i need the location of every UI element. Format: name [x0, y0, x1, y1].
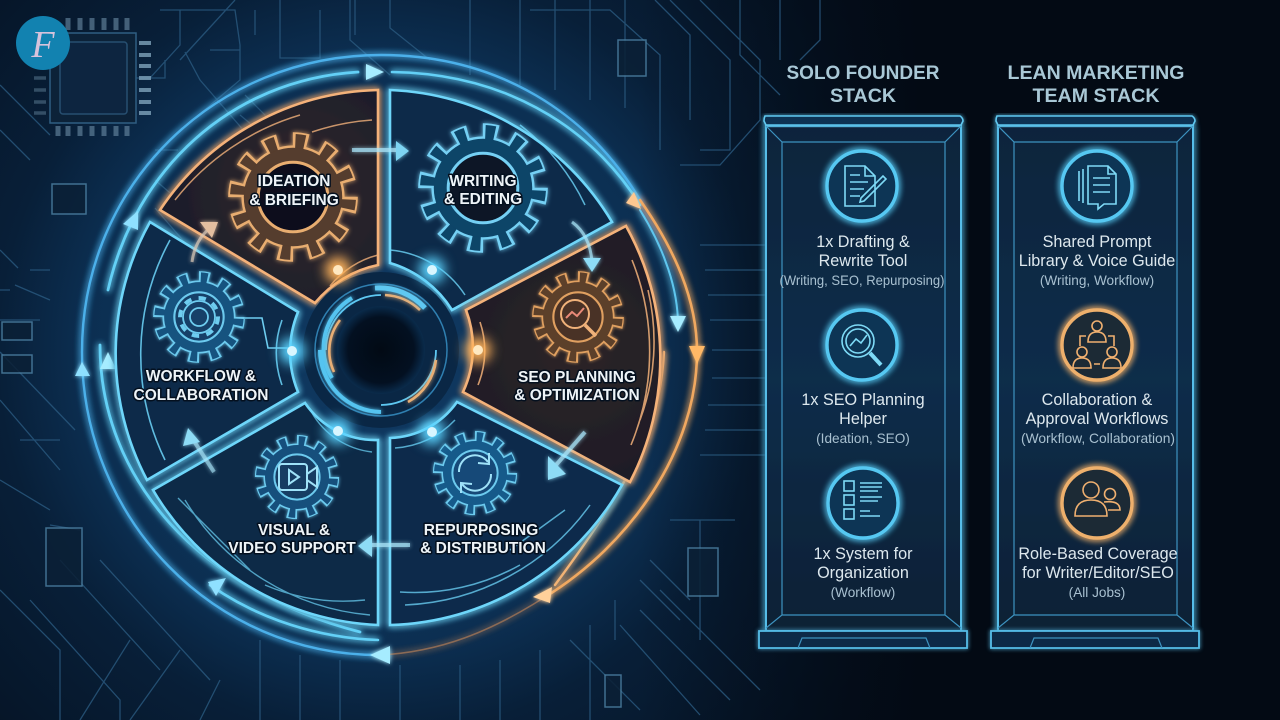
segment: visual & video — [153, 403, 378, 625]
logo — [16, 16, 70, 70]
icon: drafting — [827, 151, 897, 221]
text: system: (Workflow) — [831, 585, 895, 600]
text: drafting tool: (Writing, SEO, Repurposing) — [780, 273, 944, 288]
text: system: 1x System for — [814, 545, 913, 563]
text: prompt library: (Writing, Workflow) — [1040, 273, 1154, 288]
wheel outer rings — [82, 55, 697, 655]
center hub — [303, 272, 459, 428]
panel: lean marketing team — [991, 116, 1199, 648]
label: visual: VIDEO SUPPORT — [228, 540, 356, 557]
text: collaboration: (Workflow, Collaboration) — [1021, 431, 1175, 446]
text: prompt library: Library & Voice Guide — [1019, 252, 1175, 270]
text: seo helper: Helper — [839, 410, 887, 428]
icon: checklist — [828, 468, 898, 538]
label: ideation: & BRIEFING — [249, 192, 339, 209]
label: workflow: COLLABORATION — [134, 387, 268, 404]
chip: top left processor — [34, 18, 151, 136]
text: role coverage: for Writer/Editor/SEO — [1022, 564, 1174, 582]
icon: inner cog — [180, 298, 218, 336]
icon: shared prompt library — [1062, 151, 1132, 221]
label: repurposing: & DISTRIBUTION — [420, 540, 546, 557]
label: repurposing: REPURPOSING — [424, 522, 538, 539]
text: collaboration: Collaboration & — [1042, 391, 1153, 409]
label: SEO: SEO PLANNING — [518, 369, 636, 386]
heading: lean marketing team stack: LEAN MARKETING — [1008, 62, 1184, 84]
icon: seo helper — [827, 310, 897, 380]
text: drafting tool: Rewrite Tool — [819, 252, 907, 270]
icon: collaboration — [1062, 310, 1132, 380]
text: collaboration: Approval Workflows — [1026, 410, 1168, 428]
connector arrows between segments — [183, 141, 601, 557]
text: role coverage: (All Jobs) — [1069, 585, 1125, 600]
circuit board traces — [0, 0, 820, 720]
heading: solo founder stack: SOLO FOUNDER — [786, 62, 940, 84]
segment: repurposing & distribution — [390, 402, 622, 625]
ring arrows — [75, 64, 705, 664]
icon: magnifier chart — [561, 300, 596, 336]
text: seo helper: (Ideation, SEO) — [816, 431, 910, 446]
chip: small components — [2, 40, 718, 707]
icon: team roles — [1062, 468, 1132, 538]
icon: video camera — [279, 464, 317, 490]
text: role coverage: Role-Based Coverage — [1018, 545, 1178, 563]
logo: F — [30, 24, 55, 66]
glowing nodes — [279, 257, 491, 445]
text: system: Organization — [817, 564, 909, 582]
heading: lean marketing team stack: TEAM STACK — [1032, 85, 1160, 107]
segment: SEO planning — [463, 226, 660, 482]
label: workflow: WORKFLOW & — [146, 368, 256, 385]
label: writing: WRITING — [449, 173, 517, 190]
label: SEO: & OPTIMIZATION — [514, 387, 640, 404]
text: seo helper: 1x SEO Planning — [801, 391, 925, 409]
segment: writing & editing — [390, 90, 612, 310]
heading: solo founder stack: STACK — [830, 85, 896, 107]
label: visual: VISUAL & — [258, 522, 330, 539]
panel: solo founder — [759, 116, 967, 648]
text: drafting tool: 1x Drafting & — [816, 233, 910, 251]
label: writing: & EDITING — [444, 191, 522, 208]
text: prompt library: Shared Prompt — [1043, 233, 1152, 251]
segment: workflow & collaboration — [116, 222, 298, 480]
icon: refresh — [459, 453, 491, 493]
segment: ideation & briefing — [160, 90, 378, 303]
label: ideation: IDEATION — [258, 173, 330, 190]
